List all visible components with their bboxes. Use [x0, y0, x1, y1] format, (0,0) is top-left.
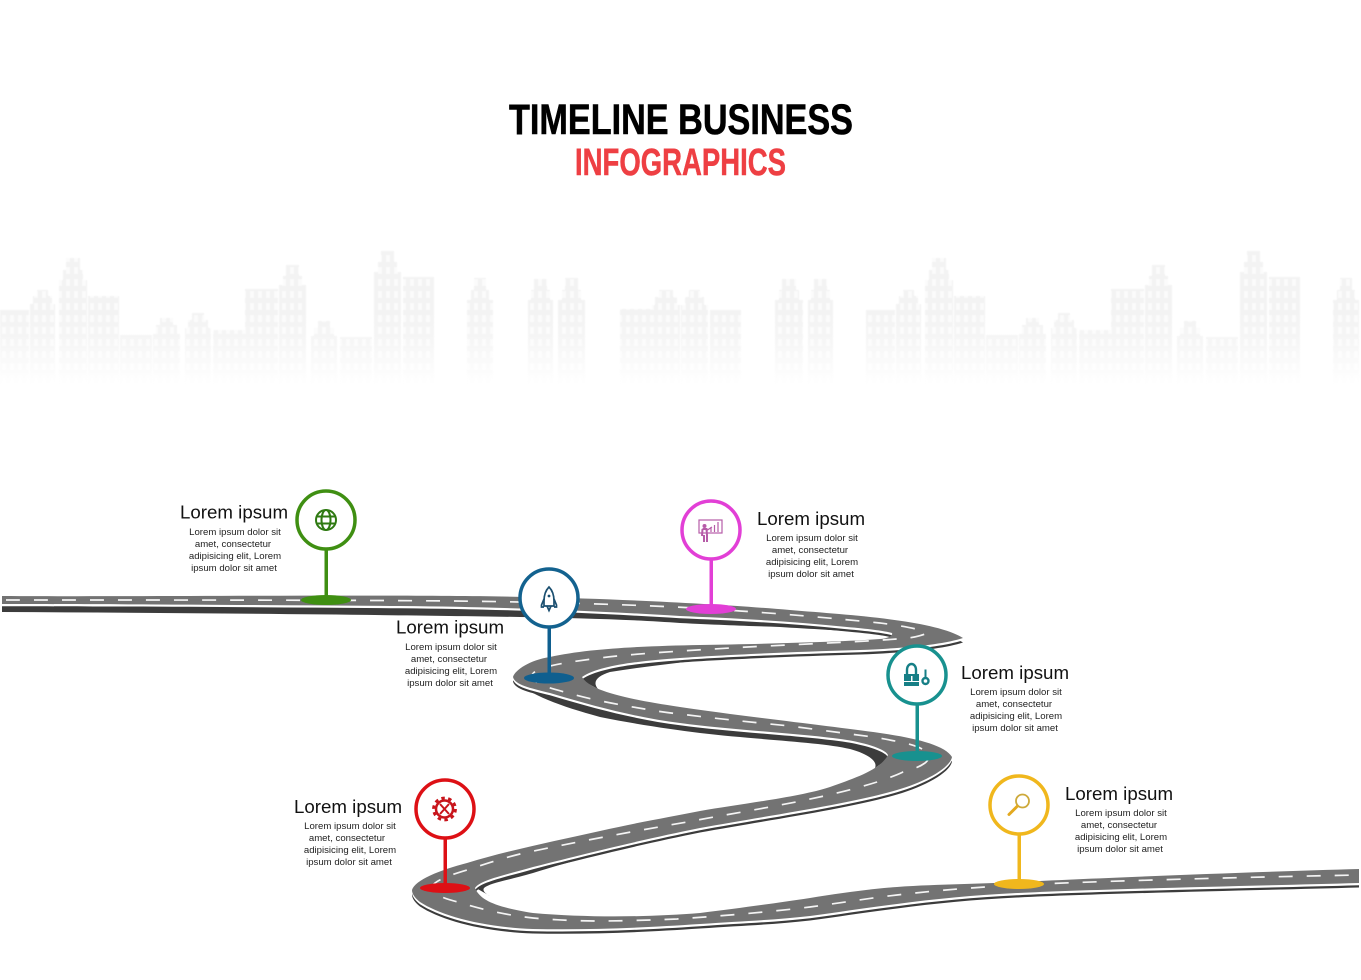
pin circle	[520, 569, 578, 627]
icon: presenter with chart	[699, 520, 722, 542]
body text: amet, consectetur	[772, 545, 849, 556]
heading: Lorem ipsum	[757, 508, 865, 529]
winding road	[2, 596, 1359, 934]
body text: adipisicing elit, Lorem	[766, 557, 858, 568]
body text: amet, consectetur	[976, 699, 1053, 710]
heading: Lorem ipsum	[396, 616, 504, 638]
body text: amet, consectetur	[195, 539, 272, 550]
pin circle	[888, 646, 946, 704]
title	[509, 96, 853, 184]
body text: Lorem ipsum dolor sit	[970, 687, 1062, 698]
body text: adipisicing elit, Lorem	[1075, 832, 1167, 843]
pin stem and base	[420, 838, 470, 893]
pin stem and base	[686, 559, 736, 614]
body text: Lorem ipsum dolor sit	[304, 821, 396, 832]
body text: amet, consectetur	[411, 654, 488, 665]
pin stem and base	[301, 549, 351, 605]
pin circle	[297, 491, 355, 549]
pin stem and base	[994, 834, 1044, 889]
road centre dashes	[6, 600, 1359, 921]
body text: Lorem ipsum dolor sit	[189, 527, 281, 538]
body text: Lorem ipsum dolor sit	[766, 533, 858, 544]
body text: ipsum dolor sit amet	[191, 563, 277, 574]
milestone: teal lock and key	[888, 646, 1069, 761]
body text: Lorem ipsum dolor sit	[405, 642, 497, 653]
body text: ipsum dolor sit amet	[1077, 844, 1163, 855]
pin circle	[682, 501, 740, 559]
body text: adipisicing elit, Lorem	[304, 845, 396, 856]
road white kerb	[2, 598, 1359, 931]
icon: lock and key	[904, 664, 928, 686]
body text: amet, consectetur	[1081, 820, 1158, 831]
milestone: magenta presentation	[682, 501, 865, 614]
road shadow edge	[2, 600, 1359, 934]
pin circle	[990, 776, 1048, 834]
milestone: green globe	[180, 491, 355, 605]
pin stem and base	[892, 704, 942, 761]
icon: globe	[316, 510, 336, 530]
icon: magnifier	[1009, 794, 1029, 814]
icon: gear with tools	[434, 798, 456, 820]
title line: timeline business: TIMELINE BUSINESS	[509, 96, 853, 144]
body text: adipisicing elit, Lorem	[189, 551, 281, 562]
title line: infographics: INFOGRAPHICS	[575, 142, 786, 184]
milestone: red gear	[294, 780, 474, 893]
heading: Lorem ipsum	[180, 502, 288, 522]
body text: adipisicing elit, Lorem	[970, 711, 1062, 722]
body text: ipsum dolor sit amet	[972, 723, 1058, 734]
body text: adipisicing elit, Lorem	[405, 666, 497, 677]
body text: ipsum dolor sit amet	[407, 678, 493, 689]
pin circle	[416, 780, 474, 838]
heading: Lorem ipsum	[1065, 783, 1173, 804]
road surface	[2, 596, 1359, 929]
icon: rocket	[542, 587, 556, 610]
heading: Lorem ipsum	[294, 796, 402, 817]
milestone: blue rocket	[396, 569, 578, 689]
body text: Lorem ipsum dolor sit	[1075, 808, 1167, 819]
body text: ipsum dolor sit amet	[306, 857, 392, 868]
milestone: yellow magnifier	[990, 776, 1173, 889]
body text: amet, consectetur	[309, 833, 386, 844]
pin stem and base	[524, 627, 574, 684]
heading: Lorem ipsum	[961, 662, 1069, 683]
city skyline background	[0, 252, 1358, 344]
body text: ipsum dolor sit amet	[768, 569, 854, 580]
